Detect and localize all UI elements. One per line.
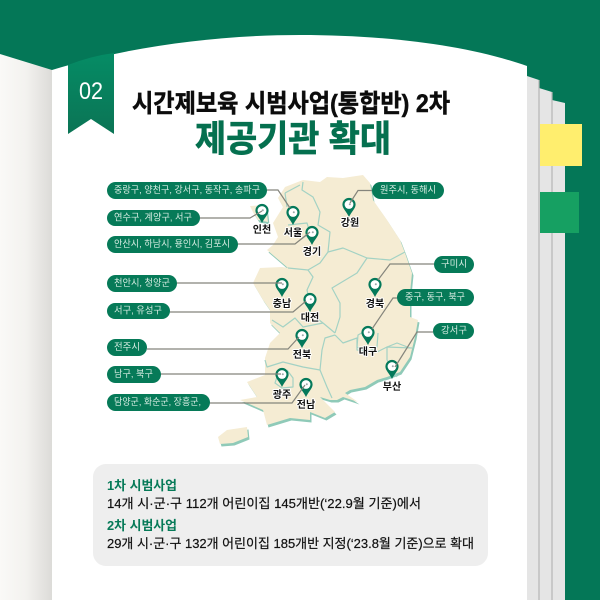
- pin: Gwangju: [273, 368, 291, 401]
- label: Jungnang etc: 중랑구, 양천구, 강서구, 동작구, 송파구: [114, 184, 260, 196]
- title line 1: 시간제보육 시범사업(통합반) 2차: [132, 90, 450, 118]
- label: Cheonan etc: 천안시, 청양군: [114, 278, 170, 289]
- pin: Incheon: [253, 204, 271, 236]
- pin: Jeonnam: [297, 378, 315, 411]
- map shadow: [220, 178, 420, 446]
- round 2 heading: 2차 시범사업: [107, 518, 177, 533]
- label: Ansan etc: 안산시, 하남시, 용인시, 김포시: [114, 238, 230, 250]
- label: Yeonsu etc: 연수구, 계양구, 서구: [114, 212, 192, 224]
- pin: Busan: [383, 360, 401, 393]
- yellow index tab: [540, 124, 582, 166]
- label: Nam-gu, Buk-gu: [107, 366, 161, 383]
- pin: Gangwon: 강원: [341, 216, 359, 229]
- pin: Daejeon: 대전: [301, 311, 319, 324]
- stacked right pages: [527, 76, 565, 600]
- label: Gangseo-gu: 강서구: [441, 326, 467, 336]
- label: Jeonju: 전주시: [114, 342, 140, 353]
- pin: Seoul: [284, 206, 302, 239]
- pin: Gyeonggi: 경기: [303, 245, 321, 258]
- label: Nam-gu, Buk-gu: 남구, 북구: [114, 369, 153, 380]
- map landmass: [218, 175, 418, 444]
- label: Gumi: [434, 256, 474, 273]
- ribbon badge with number 02: [68, 53, 114, 134]
- label: Yeonsu etc: [107, 210, 200, 226]
- round 1 detail: 14개 시·군·구 112개 어린이집 145개반(‘22.9월 기준)에서: [107, 496, 421, 511]
- pin: Chungnam: 충남: [273, 297, 291, 310]
- label: Jeonju: [107, 339, 147, 356]
- info panel: [93, 464, 488, 566]
- label: Damyang etc: [107, 394, 210, 411]
- round 1 heading: 1차 시범사업: [107, 478, 177, 493]
- pin: Jeonbuk: [293, 329, 311, 361]
- label: Ansan etc: [107, 236, 238, 253]
- label: Jung-gu, Dong-gu, Buk-gu: [397, 289, 474, 306]
- label: Seo-gu, Yuseong-gu: [107, 303, 170, 319]
- pin: Incheon: 인천: [253, 223, 271, 236]
- leader lines: [147, 190, 434, 403]
- pin: Gwangju: 광주: [273, 389, 291, 401]
- left page: [0, 54, 52, 600]
- label: Jungnang etc: [107, 182, 267, 199]
- pin: Jeonnam: 전남: [297, 398, 315, 411]
- pin: Busan: 부산: [383, 380, 401, 393]
- pin: Gangwon: [341, 198, 359, 229]
- label: Damyang etc: 담양군, 화순군, 장흥군,: [114, 396, 201, 408]
- pin: Gyeongbuk: [366, 278, 384, 310]
- ribbon badge with number 02: 02: [79, 78, 103, 105]
- label: Gangseo-gu: [433, 323, 474, 339]
- pin: Gyeongbuk: 경북: [366, 298, 384, 310]
- title line 2: 제공기관 확대: [195, 118, 391, 159]
- label: Seo-gu, Yuseong-gu: 서구, 유성구: [114, 306, 162, 316]
- pin: Daegu: [359, 326, 377, 358]
- pin: Daejeon: [301, 293, 319, 324]
- label: Cheonan etc: [107, 275, 177, 292]
- label: Gumi: 구미시: [441, 259, 467, 270]
- pin: Jeonbuk: 전북: [293, 349, 311, 361]
- green index tab: [540, 192, 579, 233]
- label: Wonju, Donghae: 원주시, 동해시: [380, 184, 436, 196]
- label: Wonju, Donghae: [372, 182, 444, 199]
- pin: Chungnam: [273, 278, 291, 310]
- main white page: [52, 35, 527, 600]
- pin: Gyeonggi: [303, 226, 321, 258]
- pin: Seoul: 서울: [284, 226, 302, 239]
- pin: Daegu: 대구: [359, 345, 377, 358]
- label: Jung-gu, Dong-gu, Buk-gu: 중구, 동구, 북구: [405, 292, 465, 303]
- region borders: [265, 182, 412, 398]
- map of South Korea: [218, 175, 420, 446]
- round 2 detail: 29개 시·군·구 132개 어린이집 185개반 지정(‘23.8월 기준)으로 확대: [107, 536, 474, 551]
